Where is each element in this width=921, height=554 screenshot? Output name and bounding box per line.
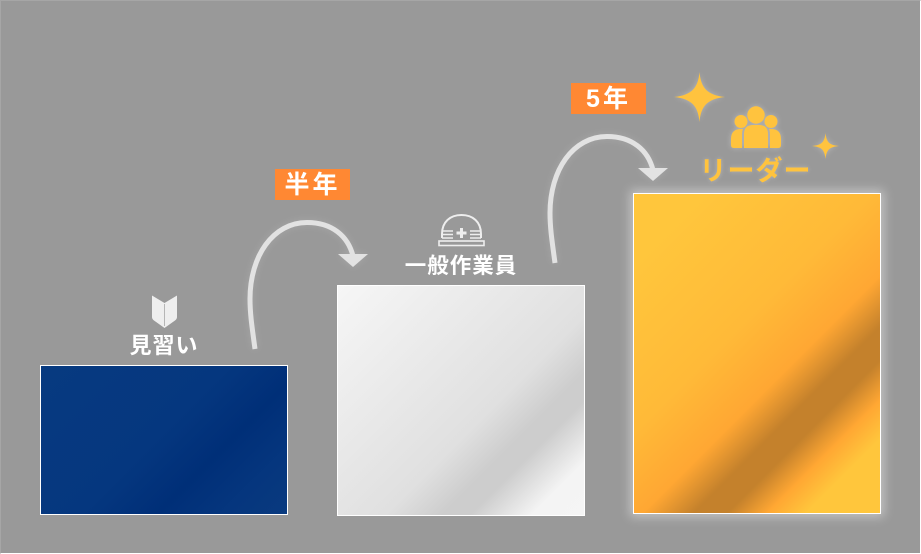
tag: half year <box>275 169 350 200</box>
label: leader: リーダー <box>700 156 812 186</box>
panel: leader step <box>633 193 881 514</box>
panel: general worker step <box>337 285 585 516</box>
tag: half year: 半年 <box>284 171 340 199</box>
panel: beginner step <box>40 365 288 515</box>
tag: five years: 5年 <box>586 85 631 113</box>
label: general worker: 一般作業員 <box>405 254 517 278</box>
label: beginner: 見習い <box>129 333 198 358</box>
tag: five years <box>571 83 646 114</box>
